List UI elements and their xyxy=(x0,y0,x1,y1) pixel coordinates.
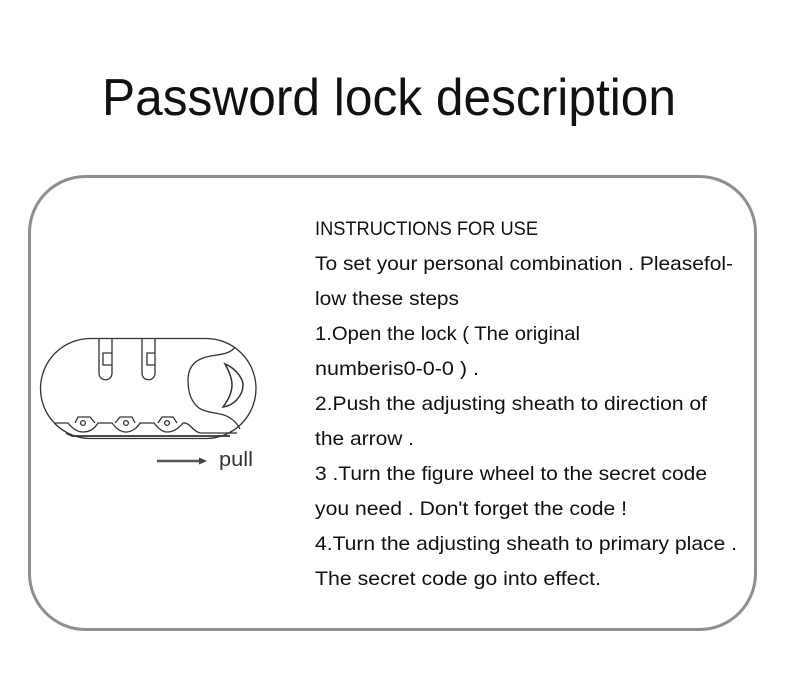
slider slot one xyxy=(99,339,112,380)
title: Password lock description xyxy=(102,69,676,127)
figure wheels and lower rail xyxy=(55,417,237,436)
instructions text xyxy=(315,218,737,590)
panel: instructions card xyxy=(30,176,756,630)
instructions text: 1.Open the lock ( The original xyxy=(315,323,580,345)
lock body outline xyxy=(40,338,256,438)
instructions text: The secret code go into effect. xyxy=(315,568,601,590)
thumb grip crescent xyxy=(223,364,243,407)
label: pull: pull xyxy=(219,449,253,471)
arrow: pull direction xyxy=(157,458,207,464)
instructions text: the arrow . xyxy=(315,428,414,450)
instructions text: you need . Don't forget the code ! xyxy=(315,498,627,520)
adjusting sheath xyxy=(188,347,240,429)
instructions text: 3 .Turn the figure wheel to the secret code xyxy=(315,463,707,485)
instructions text: low these steps xyxy=(315,288,459,310)
illustration: combination lock xyxy=(40,338,256,438)
instructions text: To set your personal combination . Pleasefol- xyxy=(315,253,733,275)
slider slot two xyxy=(142,339,155,380)
instructions text: 4.Turn the adjusting sheath to primary place . xyxy=(315,533,737,555)
instructions text: numberis0-0-0 ) . xyxy=(315,358,479,380)
instructions text: 2.Push the adjusting sheath to direction of xyxy=(315,393,708,415)
instructions text: INSTRUCTIONS FOR USE xyxy=(315,218,538,240)
